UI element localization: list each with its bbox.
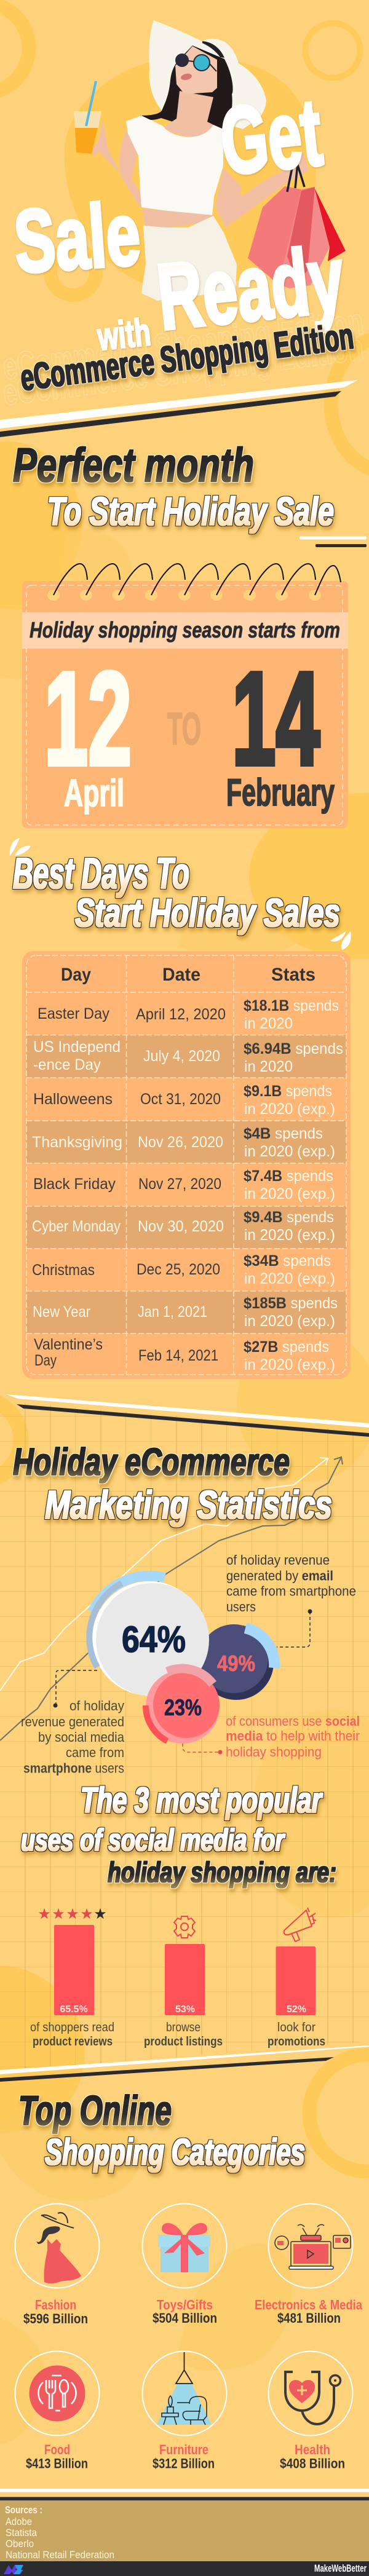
bar captions: promotions	[268, 2035, 325, 2049]
bar chart: social media uses: 65.5%	[60, 2004, 88, 2015]
row: Halloweens: $9.1B spends	[244, 1083, 332, 1100]
panel: sources: Oberlo	[6, 2538, 34, 2550]
row: Thanksgiving: Nov 26, 2020	[138, 1134, 223, 1151]
text: email stat	[226, 1552, 356, 1614]
row: New Year: $185B spends	[244, 1295, 338, 1312]
row: Cyber Monday: in 2020 (exp.)	[244, 1227, 335, 1244]
row: Cyber Monday	[32, 1209, 335, 1244]
bar captions: product listings	[144, 2035, 223, 2049]
row: Halloweens: Halloweens	[33, 1091, 113, 1108]
panel: calendar	[22, 564, 348, 828]
bar captions: look for	[277, 2021, 315, 2034]
category: Health	[268, 2351, 353, 2471]
binding holes	[47, 590, 321, 601]
row: Thanksgiving: in 2020 (exp.)	[244, 1143, 335, 1160]
category: Fashion: Fashion	[35, 2297, 76, 2313]
category: Electronics & Media: $481 Billion	[277, 2310, 341, 2326]
row: Valentine's Day	[34, 1336, 335, 1373]
heading: Holiday eCommerce: Holiday eCommerce	[13, 1441, 290, 1484]
text: consumers stat	[226, 1713, 360, 1760]
category: Toys/Gifts: $504 Billion	[153, 2310, 217, 2326]
icon: five stars: ★	[38, 1905, 51, 1922]
row: Thanksgiving: $4B spends	[244, 1125, 323, 1142]
right arm	[215, 152, 309, 227]
row: Black Friday: in 2020 (exp.)	[244, 1185, 335, 1203]
text: social revenue stat: came from	[66, 1745, 124, 1760]
category: Toys/Gifts	[143, 2203, 226, 2326]
icon: white splash left	[10, 838, 31, 856]
text: email stat: came from smartphone	[226, 1584, 356, 1598]
row: Halloweens	[33, 1083, 335, 1118]
text: email stat: users	[226, 1599, 256, 1614]
icon: stethoscope	[285, 2372, 334, 2424]
row: US Independence Day: $6.94B spends	[244, 1040, 343, 1057]
bar chart: social media uses	[54, 1925, 315, 2015]
row: Christmas: Dec 25, 2020	[137, 1261, 220, 1278]
sunglasses	[175, 53, 216, 71]
season band	[22, 612, 348, 649]
growth lines chart	[0, 1457, 343, 1740]
bar: promotions	[276, 1946, 315, 2015]
row: Thanksgiving	[32, 1125, 335, 1160]
bar captions: browse	[166, 2021, 200, 2034]
row: Thanksgiving: Thanksgiving	[32, 1134, 122, 1151]
heading: Best Days To: Best Days To	[13, 850, 189, 898]
footer stripes	[0, 2489, 369, 2500]
icon: five stars	[38, 1905, 107, 1922]
header row	[61, 965, 315, 985]
header row: Date	[162, 965, 200, 985]
icon: laptop and devices	[275, 2224, 351, 2269]
binding spirals	[54, 564, 341, 595]
text: social revenue stat: by social media	[38, 1729, 125, 1745]
white trend line	[0, 1458, 328, 1691]
text: consumers stat: of consumers use social	[226, 1713, 360, 1729]
lips	[180, 73, 192, 81]
calendar card	[22, 581, 348, 828]
icon: gift box	[161, 2247, 208, 2272]
row: Cyber Monday: $9.4B spends	[244, 1209, 334, 1226]
row: US Independence Day: -ence Day	[33, 1056, 101, 1073]
row: New Year	[33, 1295, 338, 1330]
category: Fashion: $596 Billion	[23, 2311, 88, 2326]
icon: gear	[174, 1916, 195, 1938]
grid background	[0, 1396, 369, 2078]
row: Valentine's Day: in 2020 (exp.)	[244, 1356, 335, 1373]
row: Black Friday	[33, 1167, 335, 1203]
text: social revenue stat: revenue generated	[21, 1714, 124, 1729]
stat bubble: 64%	[89, 1576, 209, 1696]
icon: dress	[44, 2239, 81, 2283]
stat bubble: 64%: 64%	[122, 1619, 186, 1660]
panel: calendar: April	[64, 772, 124, 815]
category: Furniture	[143, 2351, 226, 2471]
row: Christmas: Christmas	[32, 1262, 95, 1279]
face	[175, 46, 217, 94]
category: Fashion	[15, 2203, 100, 2326]
category: Health: $408 Billion	[280, 2455, 345, 2471]
stat bubble: 23%	[146, 1669, 220, 1744]
row: Christmas: in 2020 (exp.)	[244, 1270, 335, 1287]
bar captions	[30, 2021, 325, 2049]
bar captions: product reviews	[33, 2035, 113, 2049]
panel: sources: National Retail Federation	[6, 2549, 114, 2561]
section divider	[0, 2045, 369, 2082]
icon: brand logo	[4, 2565, 23, 2574]
header row: Stats	[271, 965, 315, 985]
row: Valentine's Day: $27B spends	[244, 1338, 329, 1356]
white top	[126, 116, 223, 215]
row: US Independence Day	[33, 1038, 343, 1075]
row: New Year: New Year	[33, 1303, 90, 1321]
section divider	[6, 1394, 369, 1437]
icon: plate with cutlery	[30, 2366, 85, 2421]
row: Easter Day: April 12, 2020	[136, 1006, 226, 1023]
icon: five stars: ★	[93, 1905, 107, 1922]
row: Halloweens: Oct 31, 2020	[140, 1091, 221, 1108]
hat band	[202, 41, 224, 58]
heading: Perfect month: Perfect month	[13, 438, 254, 492]
icon: heart	[289, 2380, 315, 2403]
row: US Independence Day: US Independ	[33, 1038, 121, 1056]
category: Furniture: $312 Billion	[153, 2455, 215, 2471]
bar: product listings	[165, 1944, 205, 2015]
panel: sources: Statista	[6, 2527, 37, 2538]
drink cup	[74, 81, 101, 154]
grey trend line	[0, 1457, 343, 1740]
icon: pendant lamp and chair	[157, 2384, 212, 2425]
text: consumers stat: holiday shopping	[226, 1744, 322, 1760]
hero illustration: woman with drink and shopping bags	[74, 20, 346, 301]
word: Sale: Sale	[11, 184, 143, 291]
heading: uses of social media for: uses of social media for	[21, 1823, 285, 1857]
panel: holiday table	[22, 951, 351, 1379]
text: social revenue stat: of holiday	[69, 1698, 124, 1713]
category: Electronics & Media	[255, 2203, 363, 2326]
text: email stat: of holiday revenue	[226, 1552, 330, 1568]
left arm	[92, 120, 145, 208]
row: New Year: Jan 1, 2021	[138, 1303, 207, 1321]
footer bar	[0, 2561, 369, 2576]
stat connectors	[56, 1611, 310, 1752]
bar: product reviews	[54, 1925, 94, 2015]
panel: sources: Adobe	[6, 2516, 32, 2527]
category: Furniture: Furniture	[159, 2442, 208, 2457]
shopping bags	[248, 163, 346, 288]
row: Valentine's Day: Day	[34, 1352, 57, 1369]
hero divider stripes	[0, 380, 358, 437]
table rules	[26, 955, 346, 1375]
stat bubble: 23%: 23%	[164, 1695, 202, 1720]
start date: 12	[44, 644, 132, 792]
row: US Independence Day: July 4, 2020	[143, 1048, 220, 1065]
row: Christmas	[32, 1252, 335, 1287]
text: social revenue stat: smartphone users	[23, 1761, 124, 1776]
panel: sources	[0, 2500, 369, 2561]
hair	[140, 45, 233, 130]
header row: Day	[61, 965, 91, 985]
bar chart: social media uses: 52%	[287, 2004, 306, 2015]
bar chart: social media uses: 53%	[175, 2004, 195, 2015]
row: Black Friday: Nov 27, 2020	[138, 1175, 221, 1193]
row: New Year: in 2020 (exp.)	[244, 1313, 335, 1330]
hat	[149, 20, 266, 129]
stat bubble: 49%: 49%	[217, 1651, 255, 1676]
row: Cyber Monday: Nov 30, 2020	[138, 1218, 224, 1235]
row: Easter Day: Easter Day	[38, 1005, 109, 1022]
midriff	[143, 208, 213, 227]
heading: Top Online: Top Online	[18, 2087, 172, 2134]
category: Health: Health	[295, 2442, 330, 2457]
row: Black Friday: Black Friday	[33, 1175, 116, 1193]
striped rows	[26, 1035, 346, 1333]
table card	[22, 951, 351, 1379]
text: social revenue stat	[21, 1698, 125, 1776]
icon: white splash right	[330, 931, 351, 950]
row: Easter Day: in 2020	[244, 1015, 293, 1032]
icon: five stars: ★	[52, 1905, 65, 1922]
icon: five stars: ★	[80, 1905, 93, 1922]
row: Valentine's Day: Feb 14, 2021	[138, 1347, 218, 1364]
icon: megaphone	[284, 1908, 316, 1942]
row: Halloweens: in 2020 (exp.)	[244, 1100, 335, 1118]
neck and chest	[163, 91, 213, 137]
word: with: with	[95, 311, 153, 358]
hero title	[11, 79, 348, 358]
accent lines	[300, 536, 367, 547]
connector word: TO	[167, 703, 201, 754]
row: Valentine's Day: Valentine’s	[34, 1336, 103, 1353]
category: Food	[15, 2351, 100, 2471]
category: Food: $413 Billion	[26, 2455, 88, 2471]
row: Black Friday: $7.4B spends	[244, 1167, 333, 1185]
bar captions: of shoppers read	[30, 2021, 114, 2034]
connector dots	[53, 1610, 312, 1755]
stat bubble: 49%	[199, 1624, 274, 1700]
text: consumers stat: media to help with their	[226, 1728, 360, 1744]
text: email stat: generated by email	[226, 1568, 333, 1584]
row: US Independence Day: in 2020	[244, 1058, 293, 1075]
row: Christmas: $34B spends	[244, 1252, 331, 1270]
icon: five stars: ★	[66, 1905, 79, 1922]
skirt	[141, 216, 237, 301]
category: Food: Food	[44, 2442, 70, 2457]
panel: sources: Sources :	[5, 2504, 42, 2516]
row: Easter Day: $18.1B spends	[244, 997, 339, 1014]
category: Toys/Gifts: Toys/Gifts	[157, 2297, 213, 2313]
row: Easter Day	[38, 997, 339, 1032]
row: Cyber Monday: Cyber Monday	[32, 1218, 121, 1235]
